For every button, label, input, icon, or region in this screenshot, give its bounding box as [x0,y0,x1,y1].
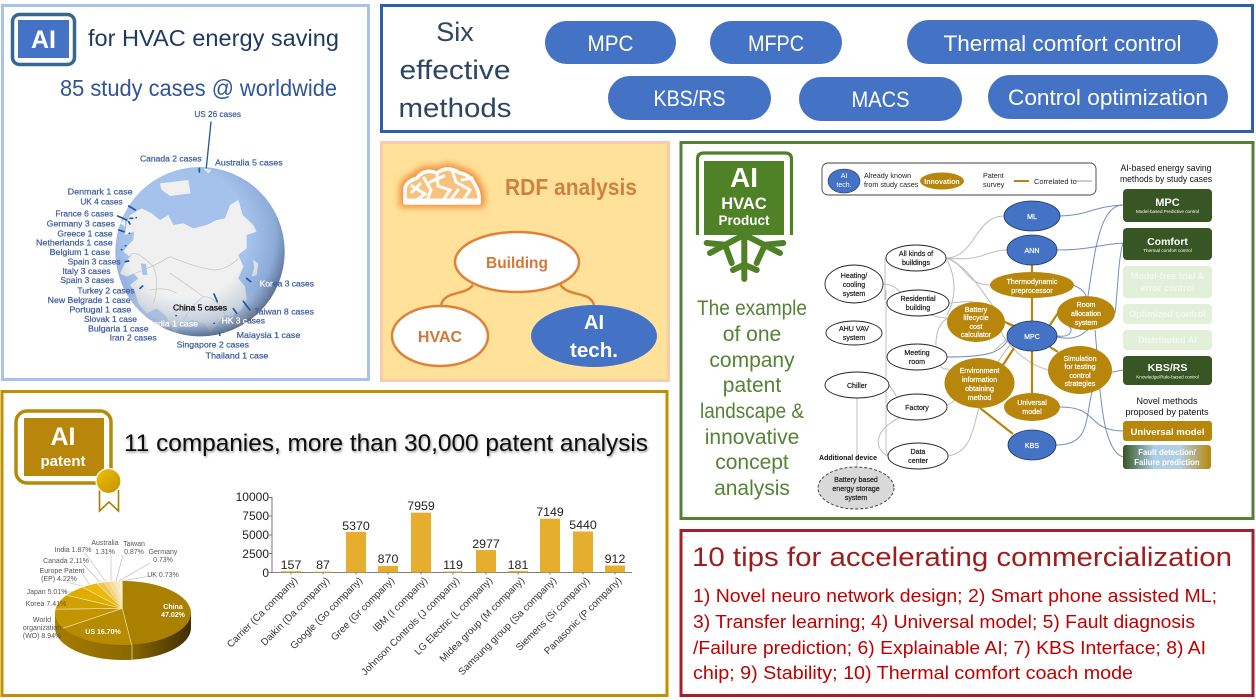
case leader markers [118,122,251,335]
pie labels: India 1.87% [55,547,91,554]
text: company patent landscape description: patent [723,374,781,397]
icon: AI HVAC product badge with snowflake: Product [718,213,770,228]
heading: Six effective methods: methods [398,93,512,123]
pie labels: Taiwan [123,541,145,548]
pie labels [23,540,186,640]
country case labels: Spain 3 cases [68,257,121,267]
method box: KBS/RS: KBS/RS [1148,362,1187,374]
icon: AI patent badge [16,411,121,511]
bar value labels: 181 [508,558,528,572]
node: Environment information obtaining method [944,358,1014,408]
country case labels: Thailand 1 case [206,351,269,361]
country case labels: Taiwan 8 cases [254,306,315,316]
bars [281,513,625,572]
text: list of tips: 3) Transfer learning; 4) Universal model; 5) Fault diagnosis [693,612,1195,632]
node: Factory [887,394,947,420]
node: Meeting room: room [909,358,925,366]
node: Thermodynamic preprocessor: Thermodynamic [1007,278,1058,286]
y axis labels [236,490,269,580]
heading: 11 companies: 11 companies, more than 30,000 patent analysis [124,430,648,457]
company labels: Samsung group (Sa company) [457,575,559,678]
node: AHU VAV system: system [843,334,865,342]
legend: AI [841,173,847,180]
method box: Universal model: Universal model [1130,427,1205,438]
country case labels: Singapore 2 cases [177,340,250,350]
heading: Six effective methods [398,17,512,123]
node: Universal model: model [1022,408,1042,416]
panel: 10 tips [681,530,1253,696]
pie labels: 0.87% [124,549,144,556]
method box: Distributed AI [1123,330,1212,350]
text: company patent landscape description [697,297,807,500]
method box: KBS/RS [1123,356,1212,385]
node: AI tech: AI [584,312,604,334]
pie labels: Japan 5.01% [27,589,67,596]
method box: Comfort [1123,228,1212,260]
icon: AI HVAC product badge with snowflake: HVAC [721,195,767,213]
pie labels: (EP) 4.22% [41,576,77,583]
pie labels: China [163,604,183,611]
node: Simulation for testing control strategies: control [1069,372,1091,380]
y axis labels: 2500 [242,547,269,561]
country case labels: Korea 3 cases [260,278,315,288]
heading: Six effective methods: Six [436,17,474,47]
country case labels: Malaysia 1 case [237,330,301,340]
node: Battery based energy storage system: energy storage [832,485,880,493]
node: Battery based energy storage system: Battery based [834,476,878,484]
company labels: IBM (I company) [371,575,430,634]
pie labels: Canada 2.11% [43,558,89,565]
node: Battery lifecycle cost calculator: lifecycle [963,314,989,322]
company labels [225,575,624,678]
legend: survey [983,180,1005,189]
country case labels: Italy 3 cases [62,266,111,276]
heading: AI-based energy saving methods: AI-based energy saving [1120,163,1212,173]
node: Data center: Data [911,448,926,456]
company labels: Google (Go company) [289,575,365,652]
label: Additional device: Additional device [819,455,877,462]
node: Heating/cooling system: Heating/ [841,272,867,280]
node: Heating/cooling system [825,265,883,303]
text: company patent landscape description: innovative [705,426,799,449]
method box: KBS/RS: Knowledge/Rule-based control [1136,374,1199,380]
node: Battery based energy storage system: system [845,494,867,502]
bar value labels: 912 [605,552,625,566]
node: Environment information obtaining method: method [968,394,991,402]
node: Room allocation system: allocation [1071,310,1101,318]
country case labels: Slovak 1 case [84,314,137,324]
node: Room allocation system: system [1075,319,1097,327]
node: AI tech [531,305,657,367]
text: list of tips: chip; 9) Stability; 10) Thermal comfort coach mode [693,663,1133,683]
panel: six effective methods [382,6,1252,132]
legend [822,163,1096,195]
node: Environment information obtaining method: Environment [960,367,999,375]
method pill: KBS/RS [608,76,771,120]
node: Meeting room [887,344,947,370]
company labels: Siemens (Si company) [514,575,592,653]
country case labels: India 1 case [151,318,198,328]
country case labels: Germany 3 cases [47,219,116,229]
node: AI tech: tech. [570,340,618,362]
company labels: Panasonic (P company) [542,575,624,657]
node: Chiller [825,372,889,398]
country case labels: Turkey 2 cases [77,285,135,295]
method box: MPC: MPC [1155,197,1180,209]
icon: AI HVAC product badge with snowflake [698,153,792,279]
legend: tech. [836,182,852,189]
heading: Novel methods proposed by patents: proposed by patents [1125,407,1209,417]
network connectors: blue links [947,205,1123,457]
method box: Fault detection [1123,445,1211,469]
bar value labels: 87 [316,558,330,572]
text: company patent landscape description: concept [715,451,789,474]
method pill: Thermal comfort control [907,20,1218,64]
text: company patent landscape description: landscape & [700,400,804,423]
icon: AI badge: AI [31,26,56,54]
company labels: Carrier (Ca company) [225,575,300,650]
country case labels: Portugal 1 case [69,305,132,315]
node: ANN [1007,235,1057,265]
pie labels: Korea 7.41% [26,601,66,608]
bar value labels: 7149 [536,505,564,519]
heading: RDF analysis: RDF analysis [505,174,637,200]
node: Data center: center [908,457,928,465]
panel: AI for HVAC energy saving [2,6,368,380]
pie chart: patents by region [23,540,191,661]
country case labels: Iran 2 cases [110,333,157,343]
text: list of tips: 1) Novel neuro network design; 2) Smart phone assisted ML; [693,586,1217,606]
country case labels: HK 3 cases [222,315,266,325]
method box: Comfort: Comfort [1147,236,1188,248]
y axis labels: 7500 [242,509,269,523]
node: Battery lifecycle cost calculator: cost [969,323,983,331]
node: Battery lifecycle cost calculator: Battery [965,306,988,314]
bar value labels: 5370 [342,519,370,533]
node: Room allocation system [1057,296,1115,330]
node: All kinds of buildings [886,245,946,271]
network connectors: grey links [857,216,1048,468]
method box: Optimized control: Optimized control [1129,309,1206,319]
pie labels: US 16.70% [85,629,121,636]
bar value labels: 2977 [472,537,500,551]
heading: Six effective methods: effective [400,55,510,85]
node: All kinds of buildings: All kinds of [899,250,933,258]
icon: AI patent badge: AI [50,423,76,451]
pie labels: 0.73% [153,557,173,564]
heading: Novel methods proposed by patents: Novel methods [1136,396,1198,406]
leader lines [62,553,150,592]
node: Environment information obtaining method: obtaining [965,385,994,393]
node: KBS [1008,430,1056,460]
node: ML: ML [1027,213,1037,221]
text: company patent landscape description: of one [723,323,781,346]
company labels: Johnson Controls (J company) [360,575,462,678]
node: Factory: Factory [905,404,929,412]
node: Thermodynamic preprocessor [990,272,1074,298]
pie labels: organization [23,625,61,632]
legend: Already known [864,171,911,180]
company labels: Midea group (M company) [438,575,527,665]
node: HVAC: HVAC [418,329,463,346]
country case labels: Denmark 1 case [68,187,133,197]
legend: Patent [983,171,1004,180]
method pill: MPC [545,21,676,64]
icon: AI patent badge: patent [40,453,86,470]
node: Battery lifecycle cost calculator [947,302,1005,342]
node: HVAC [392,306,488,366]
node: Residential building: Residential [900,295,936,303]
bar value labels: 119 [443,558,463,572]
method box: Fault detection: Fault detection/ [1138,448,1197,457]
method box: Model-free trial and error control: Model-free trial & [1131,271,1205,281]
node: Residential building: building [906,304,930,312]
node: AHU VAV system: AHU VAV [839,325,869,333]
icon: AI badge [12,14,74,64]
node: Room allocation system: Room [1077,301,1096,309]
bar chart: patents per company [225,490,632,678]
pie labels: UK 0.73% [147,572,179,579]
node: Simulation for testing control strategies [1048,346,1112,394]
panel: AI patent [0,392,667,696]
node: Environment information obtaining method: information [962,376,997,384]
country case labels: UK 4 cases [80,197,123,207]
method pill: Control optimization: Control optimization [1008,85,1208,110]
country case labels: Canada 2 cases [140,153,202,163]
pie labels: 1.31% [95,549,115,556]
globe map with case labels [36,109,315,361]
node: Simulation for testing control strategies: strategies [1065,380,1096,388]
text: company patent landscape description: company [709,349,795,372]
country case labels: US 26 cases [194,109,242,119]
pie labels: World [33,617,51,624]
company labels: Daikin (Da company) [259,575,332,648]
text: company patent landscape description: analysis [714,477,790,500]
country case labels: New Belgrade 1 case [48,295,131,305]
country case labels: Greece 1 case [57,228,113,238]
y axis labels: 5000 [242,528,269,542]
pie labels: (WO) 8.94% [23,633,61,640]
method pill: MFPC: MFPC [748,31,804,56]
method box: Model-free trial and error control [1123,266,1212,298]
node: KBS: KBS [1025,442,1039,450]
node: Simulation for testing control strategies: for testing [1064,363,1096,371]
country case labels: China 5 cases [173,303,228,313]
network connectors: gold links [980,265,1060,434]
y axis labels: 10000 [236,490,269,504]
text: list of tips: /Failure prediction; 6) Explainable AI; 7) KBS Interface; 8) AI [693,638,1206,658]
method pill: MACS [799,77,962,121]
method box: Universal model [1123,421,1212,441]
node: Heating/cooling system: system [843,290,865,298]
heading: for HVAC energy saving: for HVAC energy saving [88,25,339,51]
country case labels: Australia 5 cases [215,158,283,168]
pie labels: Europe Patent [40,568,84,575]
subheading: 85 study cases: 85 study cases @ worldwide [60,75,337,101]
node: Residential building [887,290,949,316]
legend: Correlated to [1034,177,1077,186]
icon: AI HVAC product badge with snowflake: AI [730,162,758,193]
method pill: MACS: MACS [852,87,910,112]
panel: AI HVAC product [681,142,1253,518]
heading: 10 tips for accelerating commercialization: 10 tips for accelerating commercialization [692,542,1232,572]
node: ML [1004,201,1060,231]
bar value labels: 7959 [407,499,435,513]
node: Meeting room: Meeting [904,349,930,357]
method box: MPC [1123,189,1212,222]
pie labels: 47.02% [161,612,186,619]
text: list of tips [693,586,1217,683]
node: Building: Building [486,255,548,272]
method pill: Thermal comfort control: Thermal comfort control [944,31,1182,56]
pie labels: Germany [149,549,178,556]
node: Data center [888,443,948,469]
country case labels: France 6 cases [55,208,114,218]
pie labels: Australia [91,540,119,547]
node: Building [455,232,579,292]
country case labels [36,109,315,361]
country case labels: Netherlands 1 case [36,238,113,248]
node: AHU VAV system [826,321,882,345]
node: Heating/cooling system: cooling [843,281,865,289]
method pill: MPC: MPC [588,31,634,56]
node: Universal model: Universal [1017,399,1047,407]
method pill: Control optimization [988,75,1228,119]
heading: AI-based energy saving methods [1120,163,1212,184]
legend: from study cases [864,180,919,189]
node: Universal model [1004,393,1060,421]
legend: Innovation [924,179,960,186]
node: Thermodynamic preprocessor: preprocessor [1011,287,1053,295]
bar value labels: 5440 [569,518,597,532]
text: company patent landscape description: The example [697,297,807,320]
bar value labels: 157 [281,558,301,572]
method pill: MFPC [710,21,842,64]
bar value labels: 870 [378,552,398,566]
method box: Comfort: Thermal comfort control [1143,248,1192,253]
method box: Distributed AI: Distributed AI [1138,335,1197,345]
connectors [441,284,594,305]
method box: Optimized control [1123,304,1212,324]
node: MPC: MPC [1024,333,1040,341]
node: MPC [1007,321,1057,351]
node: ANN: ANN [1025,247,1039,255]
method box: MPC: Model-based Predictive control [1136,209,1199,214]
country case labels: Bulgaria 1 case [88,324,149,334]
heading: AI-based energy saving methods: methods by study cases [1120,174,1212,184]
node: Battery lifecycle cost calculator: calculator [961,331,992,339]
country case labels: Spain 3 cases [60,275,115,285]
node: Simulation for testing control strategies: Simulation [1063,355,1097,363]
node: Chiller: Chiller [847,382,868,390]
bar value labels [281,499,625,572]
node: All kinds of buildings: buildings [902,259,930,267]
method box: Fault detection: Failure prediction [1134,458,1200,467]
panel: RDF analysis [382,142,668,380]
node: Battery based energy storage system [818,467,894,509]
y axis labels: 0 [262,566,269,580]
heading: Novel methods proposed by patents [1125,396,1209,417]
icon: brain cloud [402,166,482,205]
method pill: KBS/RS: KBS/RS [654,86,726,111]
company labels: LG Electric (L company) [413,575,495,658]
method box: Model-free trial and error control: error control [1140,283,1195,293]
country case labels: Belgium 1 case [50,247,110,257]
company labels: Gree (Gr company) [329,575,397,643]
